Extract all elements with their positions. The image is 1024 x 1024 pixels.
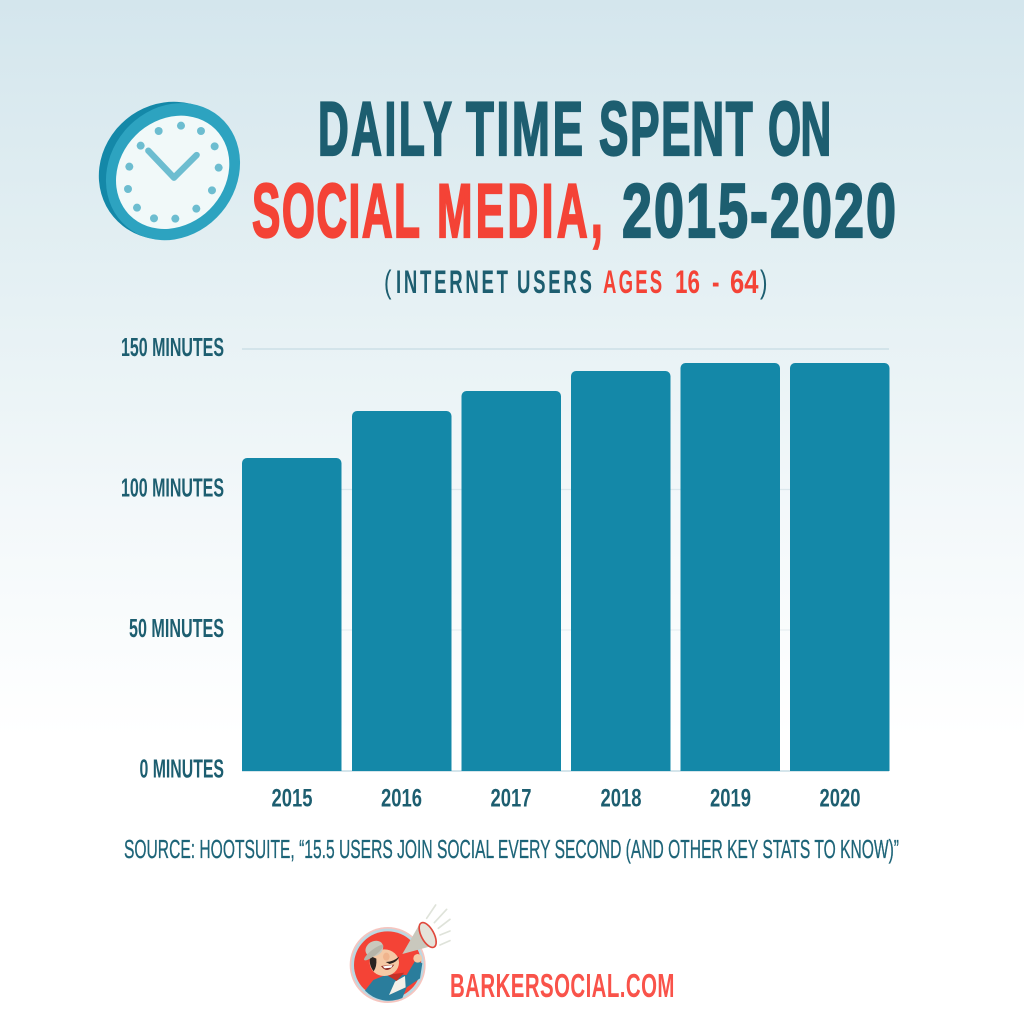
x axis labels xyxy=(272,784,860,812)
title: MEDIA, xyxy=(437,169,603,254)
title: 2015-2020 xyxy=(622,168,896,253)
subtitle xyxy=(384,264,767,301)
x axis labels: 2019 xyxy=(710,784,751,812)
y axis gridlines xyxy=(242,349,889,771)
megaphone xyxy=(402,923,436,954)
bars xyxy=(242,363,890,771)
rays xyxy=(427,905,450,945)
title: SPENT xyxy=(599,88,753,172)
head xyxy=(370,949,399,976)
body xyxy=(365,960,422,1001)
subtitle: 16 xyxy=(675,264,700,300)
subtitle: - xyxy=(712,264,719,300)
x axis labels: 2015 xyxy=(272,784,313,812)
x axis labels: 2017 xyxy=(490,784,532,812)
icon: clock xyxy=(71,73,268,268)
title xyxy=(252,87,896,254)
x axis labels: 2020 xyxy=(820,784,860,812)
x axis labels: 2018 xyxy=(600,784,642,812)
subtitle: ) xyxy=(760,264,767,300)
y axis labels: 150 MINUTES xyxy=(121,332,224,362)
website: BARKERSOCIAL.COM xyxy=(450,967,674,1004)
subtitle: ( xyxy=(384,264,392,300)
title: SOCIAL xyxy=(252,169,420,254)
title: TIME xyxy=(466,87,583,172)
bar chart xyxy=(121,332,890,812)
subtitle: INTERNET xyxy=(396,264,508,300)
y axis labels xyxy=(121,332,224,784)
y axis labels: 50 MINUTES xyxy=(129,613,224,643)
hat xyxy=(363,938,386,960)
logo: barker mascot with megaphone xyxy=(350,905,450,1003)
title: ON xyxy=(768,87,831,172)
hand xyxy=(413,954,422,963)
y axis labels: 0 MINUTES xyxy=(140,754,224,784)
subtitle: USERS xyxy=(517,264,592,300)
subtitle: AGES xyxy=(603,264,662,300)
x axis labels: 2016 xyxy=(381,784,422,812)
title: DAILY xyxy=(318,87,452,172)
subtitle: 64 xyxy=(730,265,758,301)
y axis labels: 100 MINUTES xyxy=(121,472,224,502)
